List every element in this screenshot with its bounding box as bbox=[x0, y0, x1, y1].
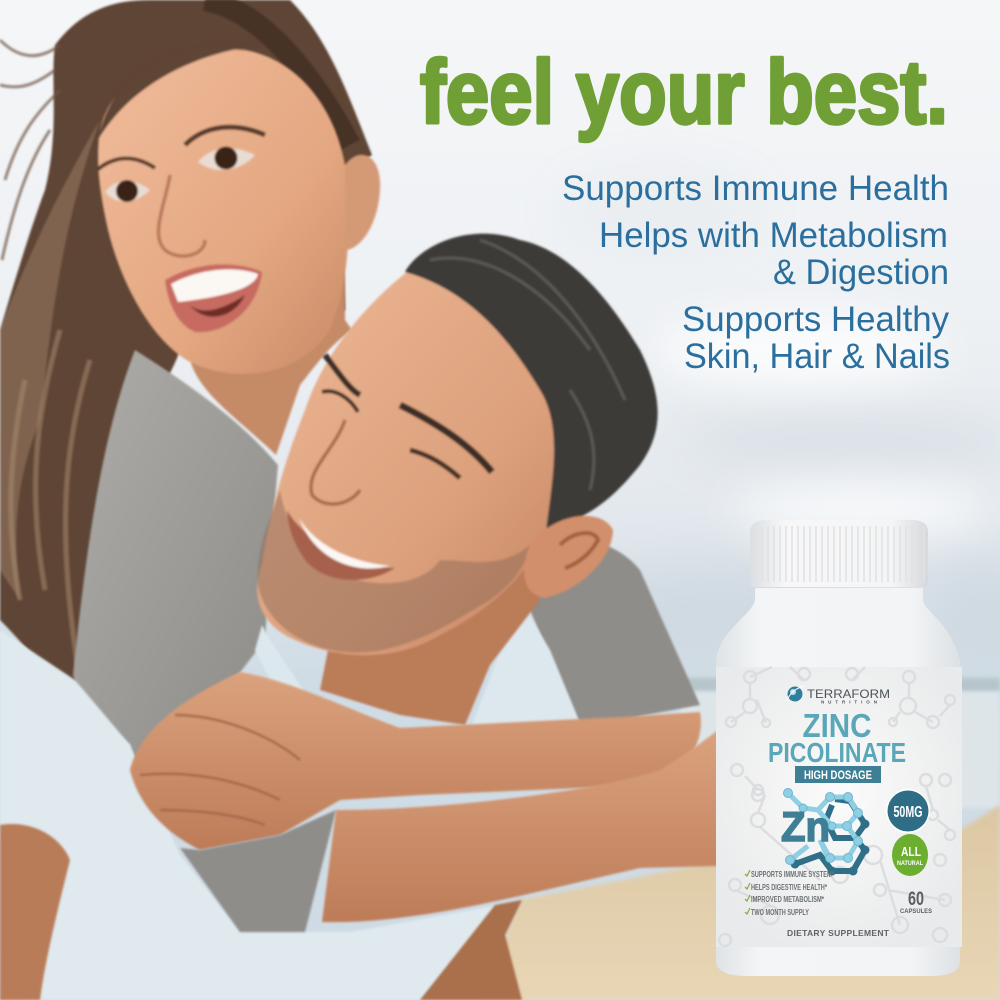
man: stubble bbox=[258, 490, 530, 653]
man: leg bbox=[420, 900, 522, 1000]
benefits text: Supports Immune Health bbox=[562, 169, 949, 208]
capsule count: CAPSULES bbox=[900, 908, 933, 915]
50mg badge: 50MG bbox=[894, 804, 922, 821]
all natural badge bbox=[892, 834, 928, 876]
woman: hair bbox=[0, 0, 372, 725]
benefit checklist: TWO MONTH SUPPLY bbox=[751, 908, 809, 917]
woman: grey shirt bbox=[73, 350, 700, 775]
label molecule pattern bbox=[719, 667, 955, 946]
high dosage badge bbox=[795, 766, 881, 783]
benefits text: Helps with Metabolism bbox=[599, 216, 948, 255]
woman: forearm wrapped around man's neck bbox=[130, 672, 701, 850]
woman: ear bbox=[345, 155, 380, 250]
capsule count: 60 bbox=[908, 889, 924, 910]
bottle label bbox=[716, 667, 962, 947]
supplement bottle bbox=[716, 520, 962, 976]
woman: smile bbox=[165, 264, 262, 332]
brand subline: NUTRITION bbox=[821, 700, 877, 704]
benefits text: & Digestion bbox=[773, 253, 949, 292]
dietary supplement line: DIETARY SUPPLEMENT bbox=[787, 928, 890, 938]
man: forearm bbox=[322, 730, 718, 922]
product name: ZINC bbox=[802, 707, 872, 744]
woman: nose bbox=[159, 175, 205, 256]
all natural badge: NATURAL bbox=[897, 860, 923, 867]
man: head and neck bbox=[257, 234, 658, 725]
bottle cap bbox=[750, 520, 928, 587]
benefit checklist: IMPROVED METABOLISM* bbox=[751, 895, 825, 904]
zinc molecule icon: Zn bbox=[781, 803, 830, 850]
benefits text: Supports Healthy bbox=[682, 300, 949, 339]
woman: neck and face bbox=[97, 43, 380, 455]
all natural badge: ALL bbox=[901, 845, 921, 859]
brand name: TERRAFORM bbox=[807, 689, 890, 701]
zinc molecule icon bbox=[781, 788, 870, 876]
capsule count bbox=[900, 889, 933, 915]
man: hair bbox=[405, 234, 658, 540]
high dosage badge: HIGH DOSAGE bbox=[804, 770, 872, 782]
benefit checklist: SUPPORTS IMMUNE SYSTEM* bbox=[751, 870, 835, 879]
benefits text bbox=[562, 169, 950, 376]
man: smile bbox=[287, 510, 395, 580]
supplement bottle: PICOLINATE bbox=[768, 737, 906, 768]
woman: windblown hair wisps bbox=[0, 40, 60, 260]
brand logo bbox=[787, 686, 890, 704]
logo mark bbox=[787, 686, 804, 702]
benefit checklist: HELPS DIGESTIVE HEALTH* bbox=[751, 883, 828, 892]
man: white t-shirt bbox=[0, 600, 585, 1000]
woman: eyes and brows bbox=[97, 127, 265, 202]
bottle body bbox=[716, 588, 960, 976]
grey sleeve cuff bbox=[180, 810, 336, 932]
man: nose bbox=[311, 420, 360, 504]
woman: leg bbox=[0, 824, 70, 1000]
man: ear bbox=[524, 516, 613, 598]
woman: hair strand over forehead bbox=[98, 43, 260, 140]
man: brows and eyes bbox=[322, 355, 492, 478]
benefits text: Skin, Hair & Nails bbox=[684, 337, 950, 376]
benefit checklist bbox=[745, 870, 835, 917]
50mg badge bbox=[886, 789, 930, 833]
